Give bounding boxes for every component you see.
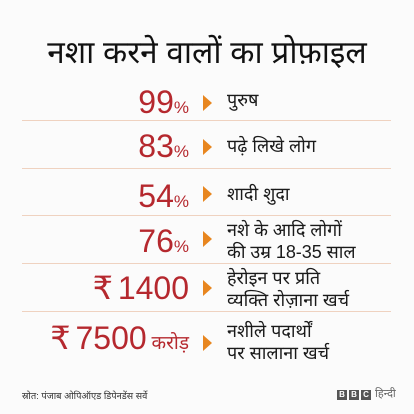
arrow — [203, 231, 212, 247]
value 54%: 54% — [138, 178, 189, 214]
value 7500 crore: ₹ 7500 करोड़ — [50, 320, 189, 356]
arrow — [203, 186, 212, 202]
label: नशे के आदि लोगों — [227, 220, 342, 240]
arrow — [203, 335, 212, 351]
label: पुरुष — [227, 90, 258, 110]
label: हेरोइन पर प्रति — [227, 268, 320, 288]
BBC blocks: B — [351, 390, 357, 399]
label: पढ़े लिखे लोग — [227, 136, 316, 156]
label — [227, 320, 330, 363]
value 76%: 76% — [138, 223, 189, 259]
row: 76% age — [138, 220, 356, 262]
label — [227, 220, 356, 262]
row: 1400 rupees — [93, 268, 350, 310]
row: 54% married — [138, 178, 290, 214]
value 99%: 99% — [138, 84, 189, 120]
arrow — [203, 95, 212, 111]
value 83%: 83% — [138, 128, 189, 164]
row: 83% educated — [138, 128, 316, 164]
arrow — [203, 139, 212, 155]
label: शादी शुदा — [227, 184, 290, 204]
BBC Hindi logo — [337, 387, 396, 400]
label — [227, 268, 350, 310]
label: पर सालाना खर्च — [227, 343, 329, 363]
title: नशा करने वालों का प्रोफ़ाइल — [47, 34, 367, 70]
row: 99% male — [138, 84, 259, 120]
value 1400: ₹ 1400 — [93, 270, 189, 306]
BBC blocks: B — [339, 390, 345, 399]
arrow — [203, 280, 212, 296]
source note: स्रोत: पंजाब ओपिऑएड डिपेनडेंस सर्वे — [22, 390, 147, 401]
row: 7500 crore — [50, 320, 330, 363]
BBC blocks — [337, 390, 371, 400]
label: की उम्र 18-35 साल — [227, 242, 356, 262]
Hindi wordmark: हिन्दी — [375, 388, 396, 400]
label: व्यक्ति रोज़ाना खर्च — [227, 290, 349, 310]
label: नशीले पदार्थों — [227, 321, 312, 341]
BBC blocks: C — [363, 390, 369, 399]
